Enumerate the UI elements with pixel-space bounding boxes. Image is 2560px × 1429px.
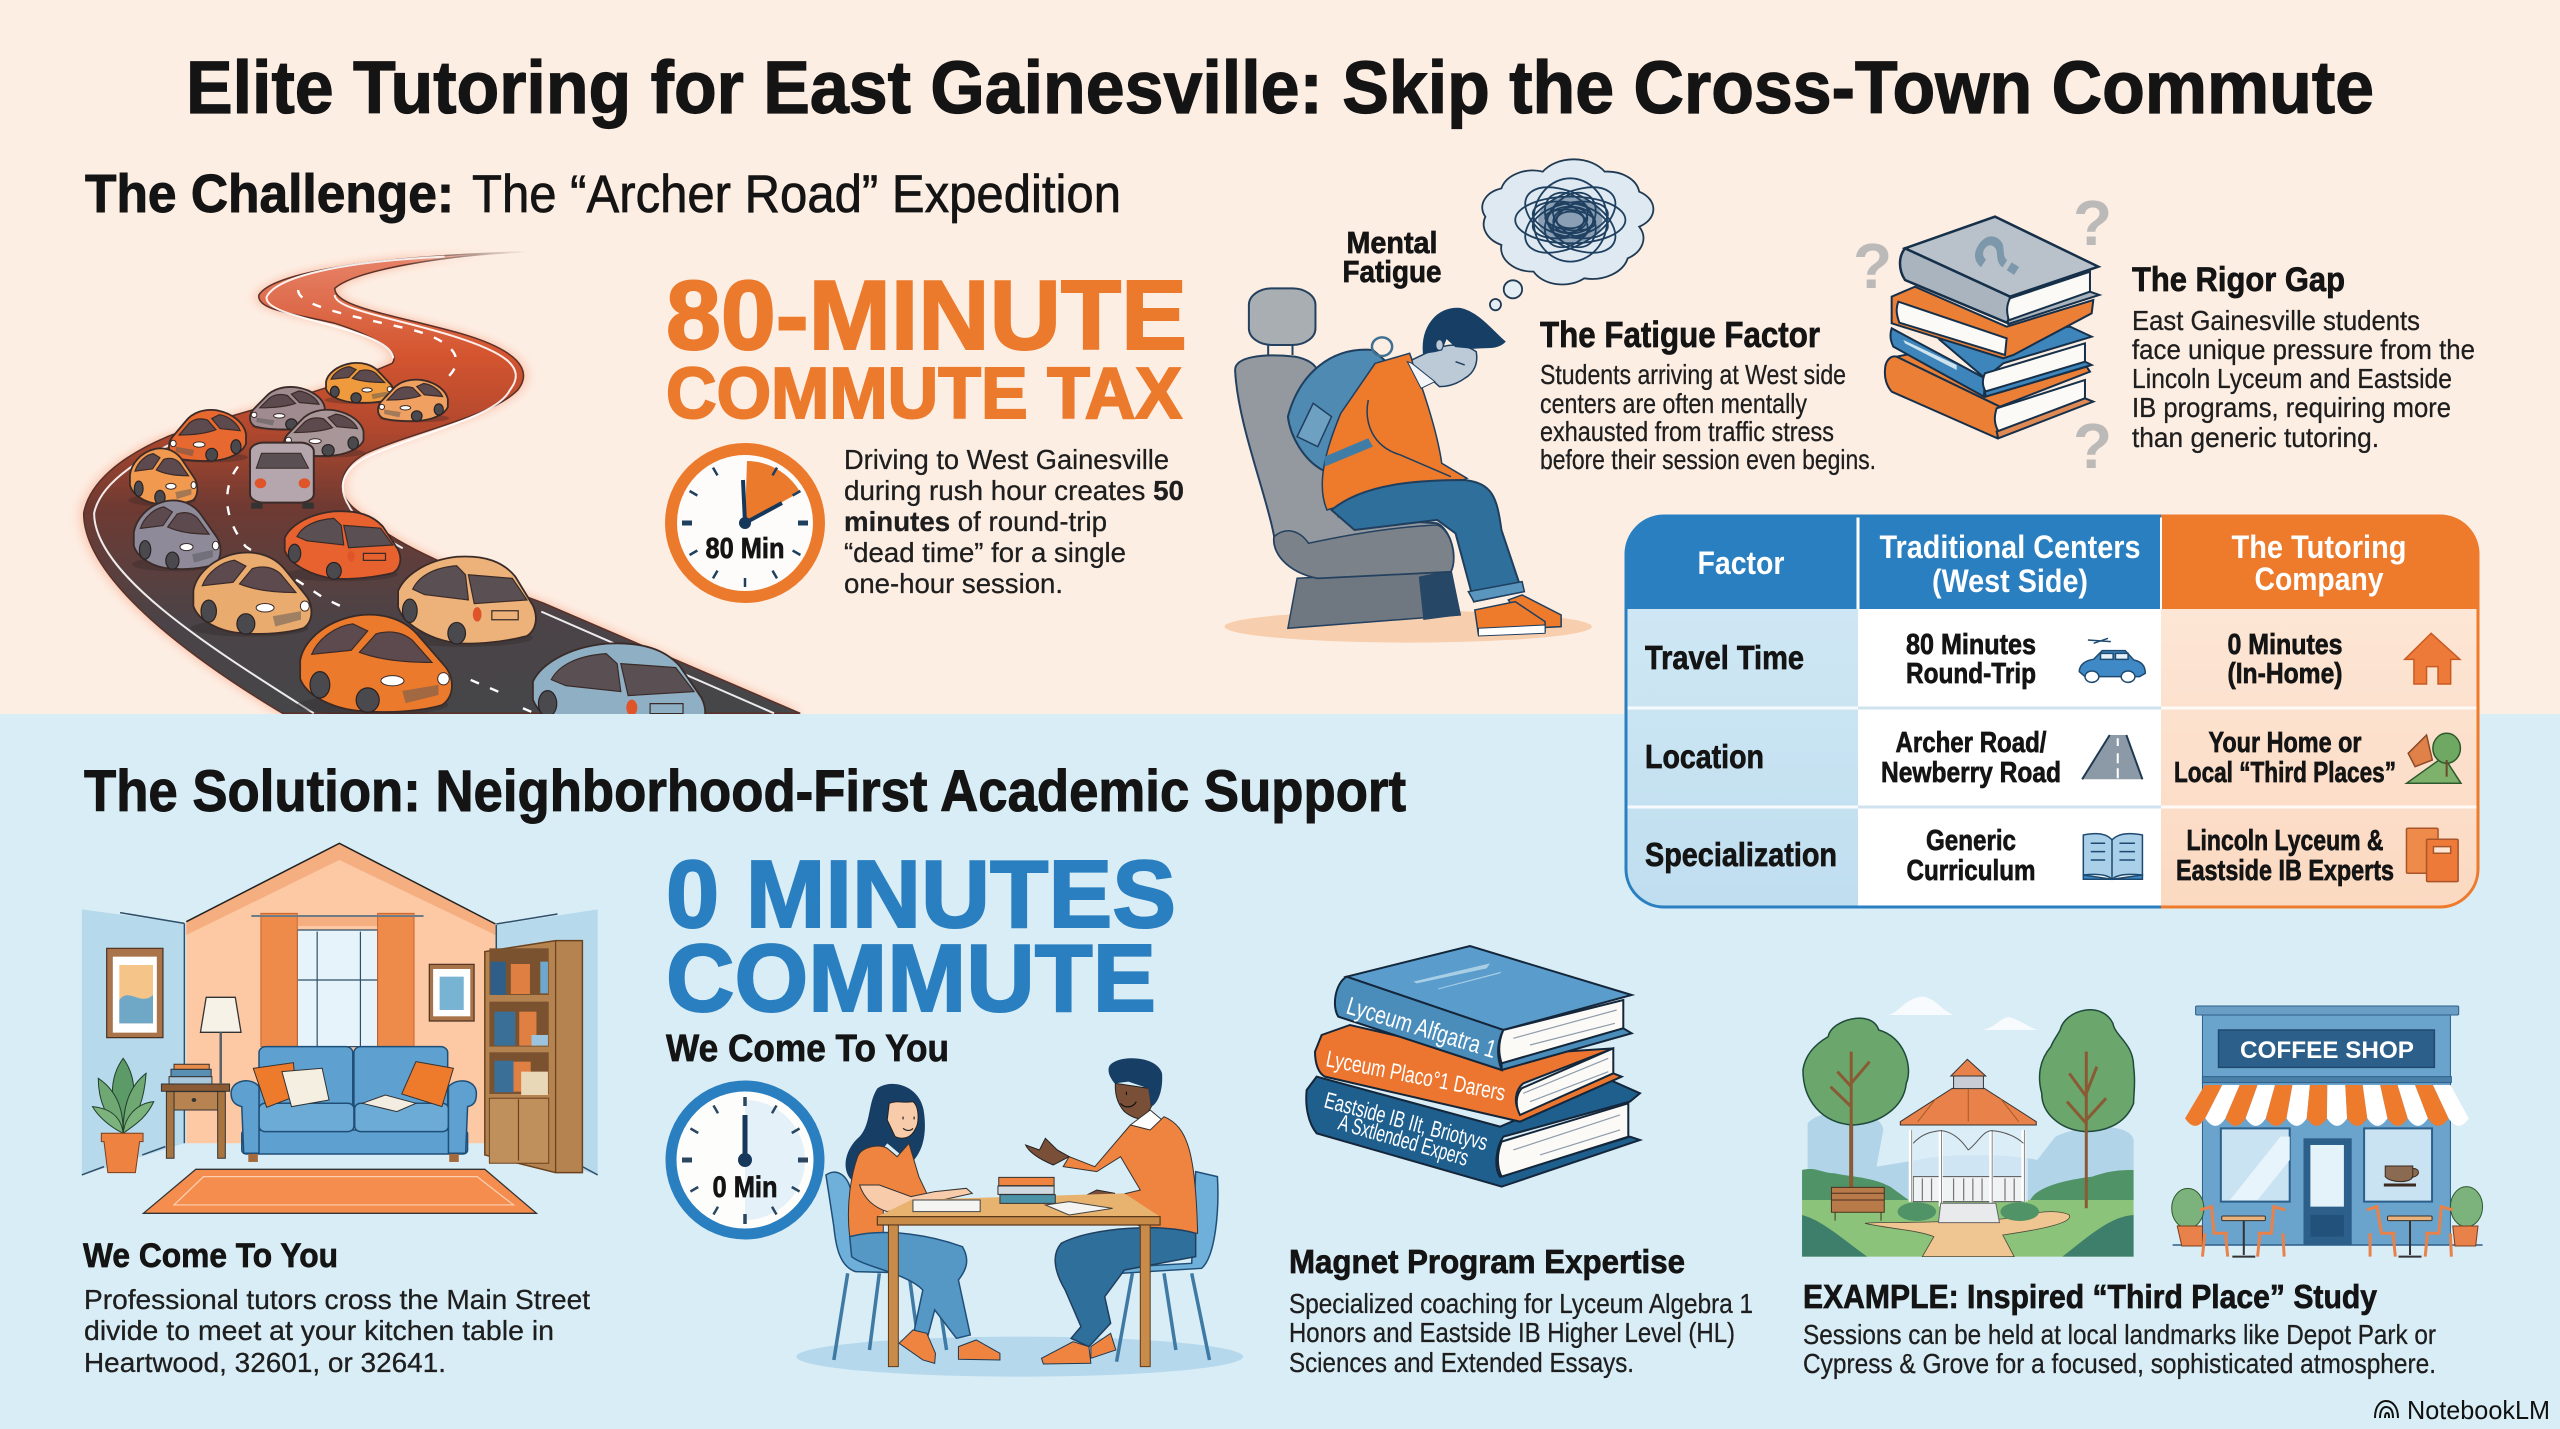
stat: 0 minutes commute: COMMUTE (666, 925, 1156, 1032)
stat: 80-minute commute tax: 80-MINUTE (666, 260, 1187, 370)
comparison table: Company (2254, 561, 2384, 597)
text: the fatigue factor: The Fatigue Factor (1540, 314, 1820, 355)
comparison table: Curriculum (1906, 855, 2036, 887)
text: third place study (1803, 1278, 2436, 1379)
text: we come to you: Professional tutors cross the Main Street (84, 1284, 590, 1315)
stat: 80-minute commute tax: COMMUTE TAX (666, 354, 1182, 434)
text: commute description: one-hour session. (844, 568, 1063, 599)
comparison table: Location (1645, 738, 1764, 775)
comparison table: Travel Time (1645, 639, 1804, 676)
illustration: magnet program textbooks: A Sxtlended Expers (1336, 1109, 1472, 1171)
comparison table: Specialization (1645, 836, 1837, 873)
heading: the challenge: The “Archer Road” Expedition (472, 165, 1121, 224)
illustration: stack of books with question marks: ? (1853, 230, 1892, 302)
text: the fatigue factor: before their session even begins. (1540, 444, 1876, 475)
comparison table: Newberry Road (1881, 757, 2061, 789)
illustration: fatigued student in car seat (1225, 288, 1592, 643)
comparison table: Factor (1698, 545, 1784, 581)
text: magnet program expertise (1289, 1243, 1753, 1378)
text: the rigor gap: East Gainesville students (2132, 305, 2420, 336)
heading: the challenge (85, 164, 1121, 224)
text: the rigor gap: IB programs, requiring more (2132, 392, 2451, 423)
illustration: stack of books with question marks: ? (2073, 187, 2112, 259)
comparison table (1626, 516, 2478, 907)
comparison table: The Tutoring (2232, 529, 2406, 565)
subheading: we come to you: We Come To You (666, 1028, 949, 1070)
text: magnet program expertise: Honors and Eastside IB Higher Level (HL) (1289, 1317, 1735, 1348)
title: Elite Tutoring for East Gainesville: Skip the Cross-Town Commute (186, 46, 2374, 129)
text: the rigor gap: Lincoln Lyceum and Eastside (2132, 363, 2452, 394)
illustration: magnet program textbooks (1306, 946, 1640, 1187)
text: third place study: Sessions can be held at local landmarks like Depot Park or (1803, 1319, 2436, 1350)
illustration: stack of books with question marks: ? (1956, 221, 2040, 294)
text: the fatigue factor: exhausted from traffic stress (1540, 416, 1834, 447)
comparison table: Archer Road/ (1896, 727, 2046, 759)
text: commute description: during rush hour creates 50 (844, 475, 1184, 506)
text: commute description: Driving to West Gainesville (844, 444, 1169, 475)
icon: 80 minute clock: 80 Min (706, 533, 784, 565)
comparison table: Your Home or (2208, 727, 2362, 759)
comparison table: Eastside IB Experts (2176, 855, 2394, 887)
comparison table: (In-Home) (2228, 658, 2342, 690)
text: commute description: minutes of round-trip (844, 506, 1107, 537)
heading: the solution: The Solution: Neighborhood-First Academic Support (84, 759, 1406, 824)
illustration: magnet program textbooks: Eastside IB IIt, Briotyvs (1322, 1087, 1491, 1155)
icon: 0 minute clock (671, 1086, 819, 1234)
comparison table: Local “Third Places” (2174, 757, 2396, 789)
illustration: magnet program textbooks: Lyceum Alfgatra 1 (1343, 992, 1500, 1064)
illustration: park gazebo (1802, 997, 2135, 1257)
label: mental fatigue (1342, 225, 1442, 289)
icons: table row icons (2079, 633, 2461, 882)
text: the rigor gap (2132, 261, 2475, 453)
illustration: stack of books with question marks: ? (2073, 410, 2112, 482)
text: magnet program expertise: Magnet Program Expertise (1289, 1243, 1685, 1280)
text: we come to you: divide to meet at your kitchen table in (84, 1315, 554, 1346)
comparison table: Traditional Centers (1880, 529, 2140, 565)
comparison table: Generic (1926, 825, 2016, 857)
text: the fatigue factor: centers are often mentally (1540, 388, 1807, 419)
illustration: stack of books with question marks (1853, 187, 2112, 482)
text: magnet program expertise: Sciences and Extended Essays. (1289, 1347, 1634, 1378)
panel: solution background (0, 714, 2560, 1429)
text: commute description (844, 444, 1184, 599)
panel: challenge background (0, 0, 2560, 714)
illustration: tutor and student at table (796, 1058, 1243, 1377)
comparison table: 0 Minutes (2228, 629, 2342, 661)
stat: 0 minutes commute: 0 MINUTES (666, 841, 1176, 948)
text: commute description: “dead time” for a single (844, 537, 1126, 568)
heading: the challenge: The Challenge: (85, 164, 454, 224)
text: the rigor gap: than generic tutoring. (2132, 422, 2379, 453)
illustration: coffee shop: COFFEE SHOP (2240, 1037, 2414, 1064)
comparison table: Round-Trip (1906, 658, 2036, 690)
illustration: congested winding road (84, 240, 800, 744)
icon: 80 minute clock (671, 449, 819, 597)
comparison table: Lincoln Lyceum & (2186, 825, 2384, 857)
text: the fatigue factor: Students arriving at West side (1540, 359, 1846, 390)
stat: 0 minutes commute (666, 841, 1176, 1032)
illustration: coffee shop (2172, 1006, 2483, 1257)
text: the fatigue factor (1540, 314, 1876, 475)
icon: 0 minute clock: 0 Min (712, 1171, 778, 1204)
label: mental fatigue: Mental (1346, 225, 1438, 260)
comparison table: (West Side) (1932, 563, 2088, 599)
text: the rigor gap: The Rigor Gap (2132, 261, 2345, 299)
text: third place study: EXAMPLE: Inspired “Third Place” Study (1803, 1278, 2378, 1315)
label: mental fatigue: Fatigue (1342, 254, 1442, 289)
text: the rigor gap: face unique pressure from the (2132, 334, 2475, 365)
logo: NotebookLM: NotebookLM (2407, 1395, 2550, 1425)
stat: 80-minute commute tax (666, 260, 1187, 434)
text: we come to you (83, 1237, 590, 1378)
icon: thought cloud with scribble (1482, 159, 1653, 310)
text: magnet program expertise: Specialized coaching for Lyceum Algebra 1 (1289, 1288, 1753, 1319)
text: third place study: Cypress & Grove for a focused, sophisticated atmosphere. (1803, 1348, 2436, 1379)
illustration: magnet program textbooks: Lyceum Placo°1 Darers (1324, 1045, 1508, 1106)
text: we come to you: We Come To You (83, 1237, 338, 1275)
illustration: living room (82, 843, 598, 1213)
text: we come to you: Heartwood, 32601, or 32641. (84, 1347, 446, 1378)
comparison table: 80 Minutes (1906, 629, 2036, 661)
